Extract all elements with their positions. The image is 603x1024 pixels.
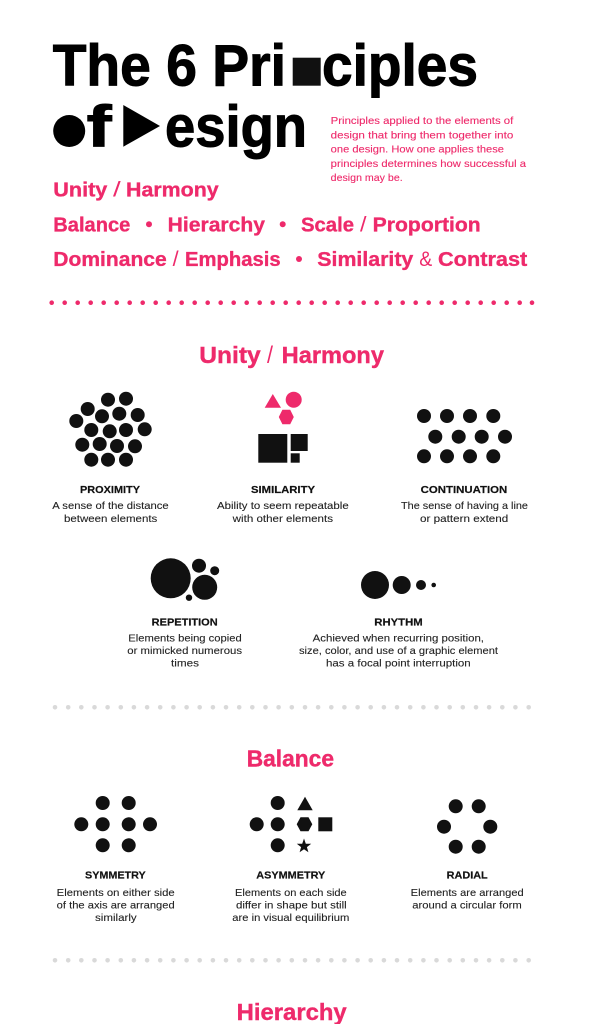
description: continuation: The sense of having a line (401, 500, 528, 512)
intro text: principles determines how successful a (331, 158, 526, 170)
label: rhythm: RHYTHM (374, 616, 423, 628)
intro text: Principles applied to the elements of (331, 115, 513, 127)
description: repetition: times (171, 658, 199, 670)
panel: asymmetry (232, 796, 350, 924)
heading: Unity / Harmony: Unity (199, 342, 261, 368)
intro text: design that bring them together into (331, 129, 513, 141)
panel: symmetry (57, 796, 175, 924)
title: esign (165, 95, 307, 160)
icon: proximity dots (69, 392, 152, 467)
icon: repetition circles (151, 558, 219, 601)
icon: continuation dots (417, 409, 512, 463)
label: similarity: SIMILARITY (251, 484, 315, 496)
panel: rhythm (299, 571, 498, 670)
icon: symmetry dots (74, 796, 157, 852)
title: ciples (322, 34, 478, 99)
description: radial (411, 887, 524, 911)
description: continuation: or pattern extend (420, 513, 508, 525)
description: radial: around a circular form (412, 899, 522, 911)
principles list: Emphasis (185, 248, 281, 271)
description: rhythm: Achieved when recurring position, (313, 632, 484, 644)
label: asymmetry: ASYMMETRY (256, 869, 325, 881)
label: repetition: REPETITION (152, 616, 218, 628)
description: asymmetry: Elements on each side (235, 887, 347, 899)
intro text (331, 115, 526, 184)
principles list: Hierarchy (168, 213, 266, 236)
principles list: Unity (53, 179, 108, 202)
description: continuation (401, 500, 528, 525)
principles list (53, 179, 527, 271)
description: asymmetry: differ in shape but still (236, 899, 347, 911)
heading: Balance: Balance (247, 746, 334, 772)
panel: radial (411, 799, 524, 911)
principles list: Balance (53, 213, 130, 236)
description: proximity: between elements (64, 513, 157, 525)
description: similarity (217, 500, 349, 525)
description: repetition: or mimicked numerous (127, 645, 242, 657)
intro text: one design. How one applies these (331, 144, 504, 156)
title (53, 34, 478, 160)
panel: repetition (127, 558, 242, 670)
title: f (87, 95, 113, 160)
description: asymmetry: are in visual equilibrium (232, 912, 350, 924)
description: symmetry (57, 887, 175, 924)
heading: Unity / Harmony: Harmony (282, 342, 384, 368)
description: symmetry: Elements on either side (57, 887, 175, 899)
description: rhythm: has a focal point interruption (326, 658, 471, 670)
description: repetition: Elements being copied (128, 632, 242, 644)
principles list: / (360, 213, 367, 236)
description: asymmetry (232, 887, 350, 924)
description: proximity: A sense of the distance (52, 500, 169, 512)
principles list: Dominance (53, 248, 167, 271)
heading: Unity / Harmony (199, 342, 384, 369)
principles list: Similarity (317, 248, 414, 271)
panel: similarity (217, 392, 349, 525)
panel: proximity (52, 392, 169, 525)
icon: similarity shapes (258, 392, 308, 463)
description: symmetry: of the axis are arranged (57, 899, 175, 911)
principles list: / (113, 179, 121, 202)
description: symmetry: similarly (95, 912, 138, 924)
description: radial: Elements are arranged (411, 887, 524, 899)
label: continuation: CONTINUATION (421, 484, 507, 496)
heading: Unity / Harmony: / (267, 342, 273, 369)
description: rhythm (299, 632, 498, 670)
label: proximity: PROXIMITY (80, 484, 140, 496)
description: repetition (127, 632, 242, 670)
description: proximity (52, 500, 169, 525)
principles list: / (173, 248, 179, 271)
intro text: design may be. (331, 172, 403, 184)
principles list: Harmony (126, 179, 219, 202)
label: radial: RADIAL (447, 869, 488, 881)
title: The 6 Pri (53, 34, 286, 99)
principles list: Scale (301, 213, 354, 236)
label: symmetry: SYMMETRY (85, 869, 146, 881)
icon: radial dots (437, 799, 497, 854)
principles list: Contrast (438, 248, 527, 271)
principles list: & (419, 248, 432, 271)
description: rhythm: size, color, and use of a graphic element (299, 645, 498, 657)
principles list: Proportion (373, 213, 481, 236)
icon: asymmetry shapes (250, 796, 332, 852)
description: similarity: Ability to seem repeatable (217, 500, 349, 512)
description: similarity: with other elements (232, 513, 333, 525)
panel: continuation (401, 409, 528, 525)
icon: rhythm circles (361, 571, 436, 599)
